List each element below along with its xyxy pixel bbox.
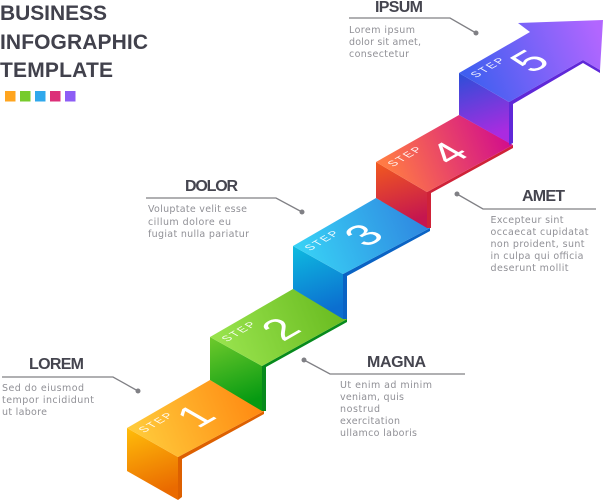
callout: lorem: tempor incididunt (2, 395, 94, 406)
step 2 (210, 289, 347, 411)
callout: ipsum: Lorem ipsum (349, 25, 415, 36)
step 2: STEP (219, 321, 259, 343)
callout: dolor: Voluptate velit esse (148, 204, 247, 215)
step 4: 4 (418, 135, 479, 170)
callout: magna: Ut enim ad minim (340, 380, 432, 391)
step 1 (127, 380, 264, 500)
callout: dolor (146, 178, 304, 240)
callout: lorem: Sed do eiusmod (2, 383, 84, 394)
callout: magna: veniam, quis (340, 392, 404, 403)
callout: amet: deserunt mollit (490, 263, 569, 274)
callout: amet: AMET (522, 188, 565, 205)
callout: magna: ullamco laboris (340, 428, 417, 439)
title: BUSINESS (0, 2, 107, 25)
callout: amet: occaecat cupidatat (490, 227, 589, 238)
callout: magna (302, 354, 465, 439)
step 3: 3 (333, 217, 394, 252)
callout: dolor: cillum dolore eu (148, 217, 231, 228)
step 2: 2 (250, 311, 311, 346)
callout: ipsum: consectetur (349, 49, 409, 60)
title (0, 2, 148, 82)
step 3: STEP (302, 230, 342, 252)
callout: lorem: LOREM (29, 356, 84, 373)
callout: magna: exercitation (340, 416, 400, 427)
callout: lorem (2, 356, 140, 418)
callout: ipsum: dolor sit amet, (349, 37, 421, 48)
step 1: STEP (136, 412, 176, 434)
step 5 arrow: 5 (499, 43, 560, 78)
step 1: 1 (165, 398, 226, 433)
callout: magna: nostrud (340, 404, 380, 415)
step 4: STEP (385, 146, 425, 168)
step 5 arrow (459, 20, 603, 145)
callout: magna: MAGNA (367, 354, 426, 371)
callout: amet: Excepteur sint (490, 215, 564, 226)
step 3 (293, 198, 430, 319)
title: TEMPLATE (0, 59, 113, 82)
colour swatches (5, 91, 76, 102)
callout: lorem: ut labore (2, 407, 47, 418)
callout: amet (454, 188, 596, 274)
step 5 arrow: STEP (468, 57, 508, 79)
callout: dolor: DOLOR (185, 178, 238, 195)
step 4 (376, 115, 513, 228)
title: INFOGRAPHIC (0, 31, 148, 54)
callout: amet: in culpa qui officia (490, 251, 584, 262)
callout: amet: non proident, sunt (490, 239, 585, 250)
callout: ipsum (349, 0, 478, 60)
callout: dolor: fugiat nulla pariatur (148, 229, 249, 240)
